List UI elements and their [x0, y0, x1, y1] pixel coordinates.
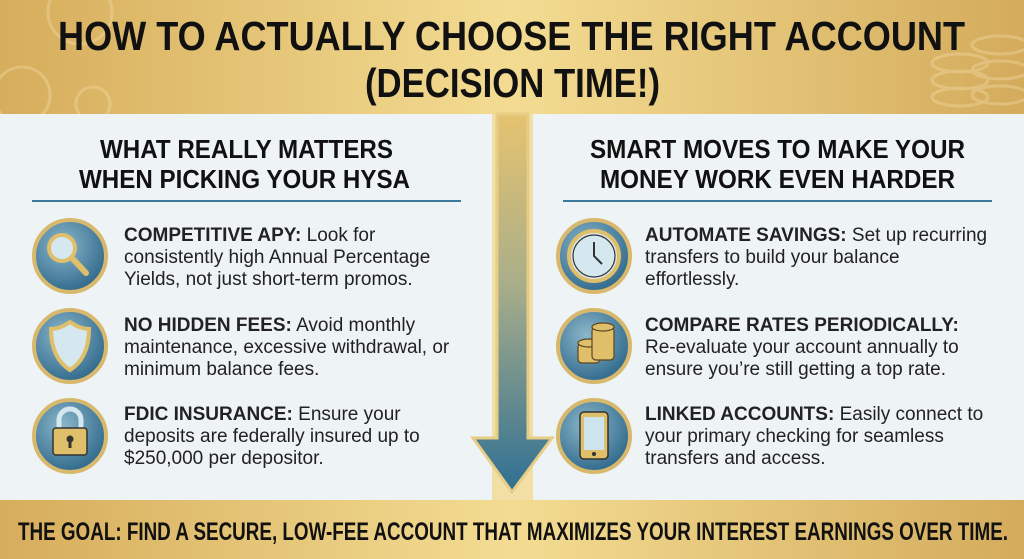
icon: phone: [558, 400, 630, 472]
item: automate savings: transfers to build your balance: [645, 247, 900, 268]
item: compare rates: COMPARE RATES PERIODICALLY:: [645, 315, 959, 336]
panel: smart moves: [533, 114, 1024, 500]
icon: shield: [34, 310, 106, 382]
item: competitive apy: consistently high Annual Percentage: [124, 247, 430, 268]
item: no hidden fees: maintenance, excessive withdrawal, or: [124, 337, 450, 358]
icon: magnifier: [34, 220, 106, 292]
bottom bar: [0, 500, 1024, 559]
item: compare rates: Re-evaluate your account annually to: [645, 337, 959, 358]
icon: clock: [558, 220, 630, 292]
item: linked accounts: transfers and access.: [645, 448, 826, 469]
item: no hidden fees: NO HIDDEN FEES: Avoid monthly: [124, 315, 415, 336]
decorative coins: [0, 0, 1024, 123]
heading right: MONEY WORK EVEN HARDER: [600, 164, 955, 194]
item: competitive apy: COMPETITIVE APY: Look for: [124, 225, 375, 246]
heading right: SMART MOVES TO MAKE YOUR: [590, 134, 965, 164]
heading left: WHAT REALLY MATTERS: [100, 134, 393, 164]
item: automate savings: AUTOMATE SAVINGS: Set up recurring: [645, 225, 987, 246]
panel: what really matters: [0, 114, 492, 500]
item: fdic insurance: deposits are federally insured up to: [124, 426, 420, 447]
header background: [0, 0, 1024, 114]
item: fdic insurance: $250,000 per depositor.: [124, 448, 324, 469]
title: (DECISION TIME!): [365, 60, 660, 106]
title: [58, 13, 965, 106]
heading left: [79, 134, 410, 194]
arrow: down: [473, 114, 552, 500]
item: fdic insurance: FDIC INSURANCE: Ensure your: [124, 404, 401, 425]
item: linked accounts: LINKED ACCOUNTS: Easily connect to: [645, 404, 983, 425]
heading right: [590, 134, 965, 194]
item: competitive apy: Yields, not just short-term promos.: [124, 269, 413, 290]
icon: lock: [34, 400, 106, 472]
item: compare rates: ensure you’re still getting a top rate.: [645, 359, 946, 380]
item: no hidden fees: minimum balance fees.: [124, 359, 319, 380]
icon: coins: [558, 310, 630, 382]
item: automate savings: effortlessly.: [645, 269, 739, 290]
item: linked accounts: your primary checking for seamless: [645, 426, 944, 447]
heading left: WHEN PICKING YOUR HYSA: [79, 164, 410, 194]
